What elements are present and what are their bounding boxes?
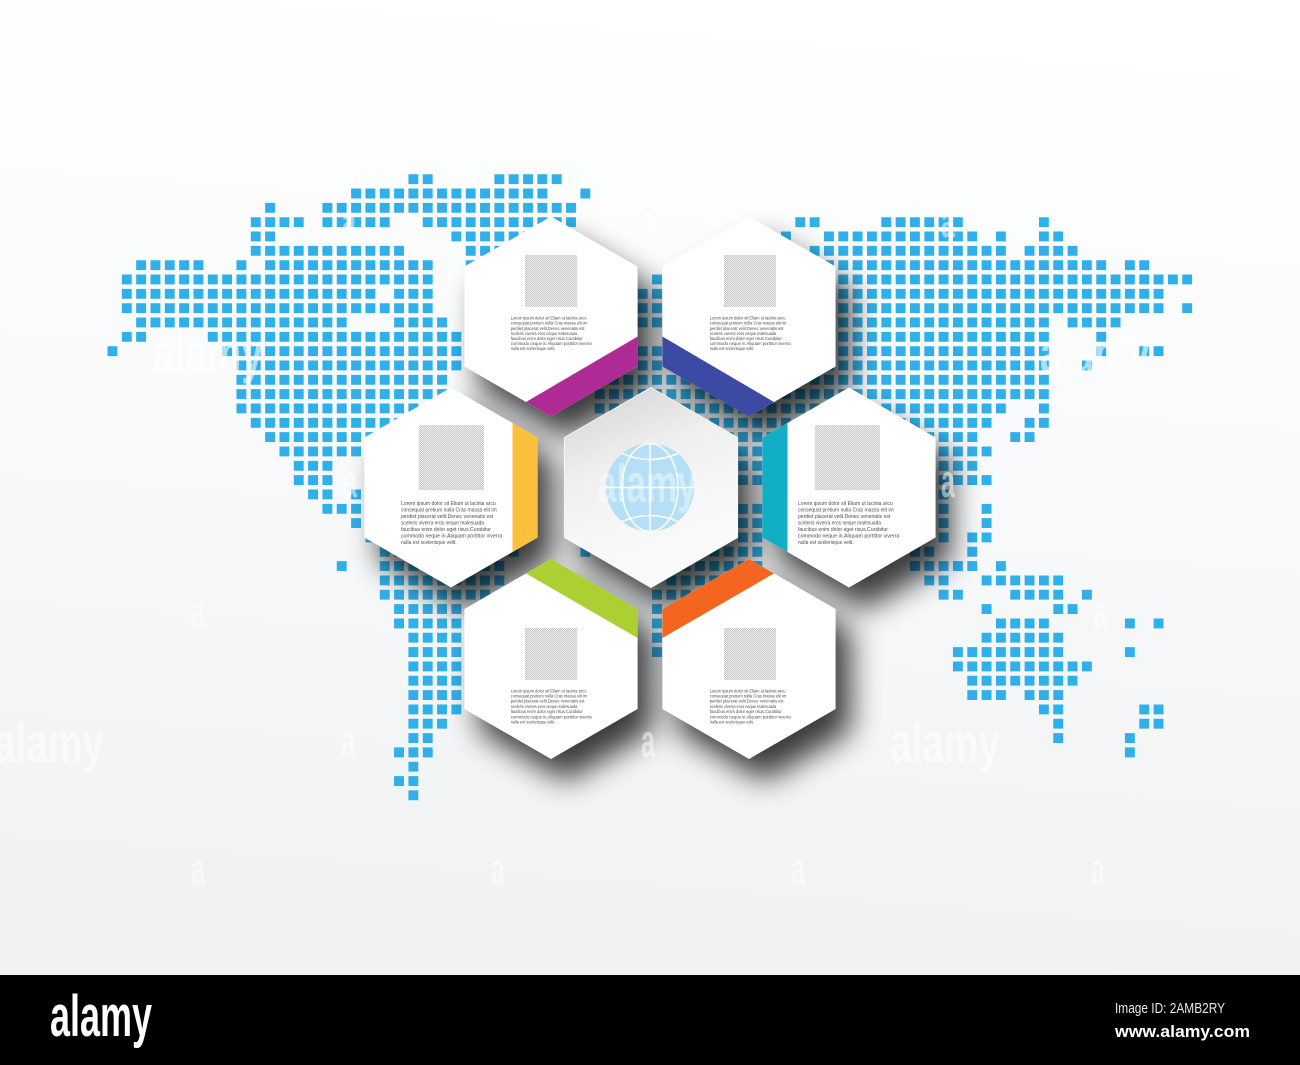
hexagon drop shadows: [379, 238, 951, 781]
text block: faucibus enim dolor eget risus.Curabitur: [798, 527, 888, 533]
footer bar: [0, 975, 1300, 1065]
text block: perdiet placerat velit.Denec venenatis est: [710, 326, 784, 331]
text block: nulla est scelerisque velit.: [710, 720, 754, 724]
text block: commodo neque in.Aliquam porttitor viverra: [710, 341, 791, 346]
colour band: purple: [526, 336, 638, 416]
website: www.alamy.com: [1114, 1022, 1250, 1041]
text block: consequat pretium nulla Cras massa elit im: [511, 694, 587, 698]
watermarks: a: [342, 195, 356, 247]
text block: [511, 688, 592, 724]
text block: nulla est scelerisque velit.: [401, 540, 457, 546]
text block: consequat pretium nulla Cras massa elit im: [798, 508, 894, 514]
watermarks: alamy: [1040, 321, 1150, 384]
watermarks: alamy: [597, 454, 697, 514]
text block: faucibus enim dolor eget risus.Curabitur: [710, 709, 782, 714]
text block: nulla est scelerisque velit.: [511, 720, 555, 724]
colour band: teal: [762, 423, 788, 552]
text block: nulla est scelerisque velit.: [798, 540, 854, 546]
text block: nulla est scelerisque velit.: [710, 346, 754, 351]
hexagon: right, teal: [762, 388, 936, 588]
colour band: orange: [662, 559, 774, 638]
watermarks: a: [1091, 843, 1105, 895]
dotted world map: [108, 179, 1197, 795]
text block: [710, 316, 791, 351]
text block: perdiet placerat velit.Denec venenatis est: [511, 699, 585, 704]
text block: perdiet placerat velit.Denec venenatis est: [710, 699, 784, 704]
text block: faucibus enim dolor eget risus.Curabitur: [401, 527, 491, 533]
hexagon: left, yellow: [364, 388, 538, 588]
colour band: blue: [662, 336, 774, 416]
image placeholder: [724, 255, 776, 307]
colour band: green: [526, 559, 638, 638]
text block: commodo neque in.Aliquam porttitor viverra: [710, 714, 791, 719]
text block: sceleris viverra eros neque malesuada: [401, 521, 485, 527]
hexagon: bottom left, green: [464, 559, 638, 759]
watermarks: [0, 195, 1150, 895]
image placeholder: [525, 628, 577, 680]
text block: sceleris viverra eros neque malesuada: [710, 704, 776, 709]
text block: faucibus enim dolor eget risus.Curabitur: [710, 336, 782, 341]
text block: commodo neque in.Aliquam porttitor viverra: [401, 534, 503, 540]
text block: Lorem ipsum dolor sit Eliam ut lacinia arcu: [401, 501, 496, 507]
watermarks: a: [341, 715, 355, 767]
text block: consequat pretium nulla Cras massa elit im: [511, 321, 587, 326]
hexagon: centre globe: [564, 388, 738, 588]
text block: consequat pretium nulla Cras massa elit im: [710, 321, 786, 326]
text block: Lorem ipsum dolor sit Eliam ut lacinia arcu: [511, 688, 587, 693]
text block: commodo neque in.Aliquam porttitor viverra: [511, 714, 592, 719]
text block: [798, 501, 900, 546]
watermarks: a: [191, 843, 205, 895]
watermarks: a: [1093, 585, 1107, 637]
text block: faucibus enim dolor eget risus.Curabitur: [511, 336, 583, 341]
text block: sceleris viverra eros neque malesuada: [511, 704, 577, 709]
image placeholder: [724, 628, 776, 680]
image placeholder: [815, 425, 880, 490]
icon: globe: [606, 444, 694, 532]
image id: Image ID: 2AMB2RY: [1115, 1000, 1225, 1017]
watermarks: a: [491, 843, 505, 895]
footer logo: alamy: [50, 984, 152, 1049]
watermarks: a: [641, 195, 655, 247]
text block: Lorem ipsum dolor sit Eliam ut lacinia arcu: [798, 501, 893, 507]
text block: Lorem ipsum dolor sit Eliam ut lacinia arcu: [710, 688, 786, 693]
text block: [710, 688, 791, 724]
image placeholder: [525, 255, 577, 307]
text block: sceleris viverra eros neque malesuada: [511, 331, 577, 336]
text block: consequat pretium nulla Cras massa elit im: [710, 694, 786, 698]
text block: [401, 501, 503, 546]
image placeholder: [419, 425, 484, 490]
hexagon: top left, purple: [464, 216, 638, 416]
text block: Lorem ipsum dolor sit Eliam ut lacinia arcu: [511, 316, 587, 321]
text block: nulla est scelerisque velit.: [511, 346, 555, 351]
text block: consequat pretium nulla Cras massa elit im: [401, 508, 497, 514]
text block: commodo neque in.Aliquam porttitor viverra: [511, 341, 592, 346]
watermarks: alamy: [890, 711, 1000, 774]
hexagon: bottom right, orange: [662, 559, 836, 759]
text block: commodo neque in.Aliquam porttitor viverra: [798, 534, 900, 540]
text block: faucibus enim dolor eget risus.Curabitur: [511, 709, 583, 714]
text block: perdiet placerat velit.Denec venenatis est: [798, 514, 891, 520]
colour band: yellow: [512, 423, 538, 552]
text block: Lorem ipsum dolor sit Eliam ut lacinia arcu: [710, 316, 786, 321]
watermarks: a: [941, 195, 955, 247]
text block: sceleris viverra eros neque malesuada: [710, 331, 776, 336]
watermarks: alamy: [153, 321, 263, 384]
text block: sceleris viverra eros neque malesuada: [798, 521, 882, 527]
watermarks: a: [191, 585, 205, 637]
text block: perdiet placerat velit.Denec venenatis est: [511, 326, 585, 331]
text block: perdiet placerat velit.Denec venenatis est: [401, 514, 494, 520]
watermarks: a: [941, 455, 955, 507]
hexagon: top right, blue: [662, 216, 836, 416]
text block: [511, 316, 592, 351]
watermarks: a: [641, 715, 655, 767]
watermarks: a: [343, 455, 357, 507]
watermarks: a: [791, 843, 805, 895]
